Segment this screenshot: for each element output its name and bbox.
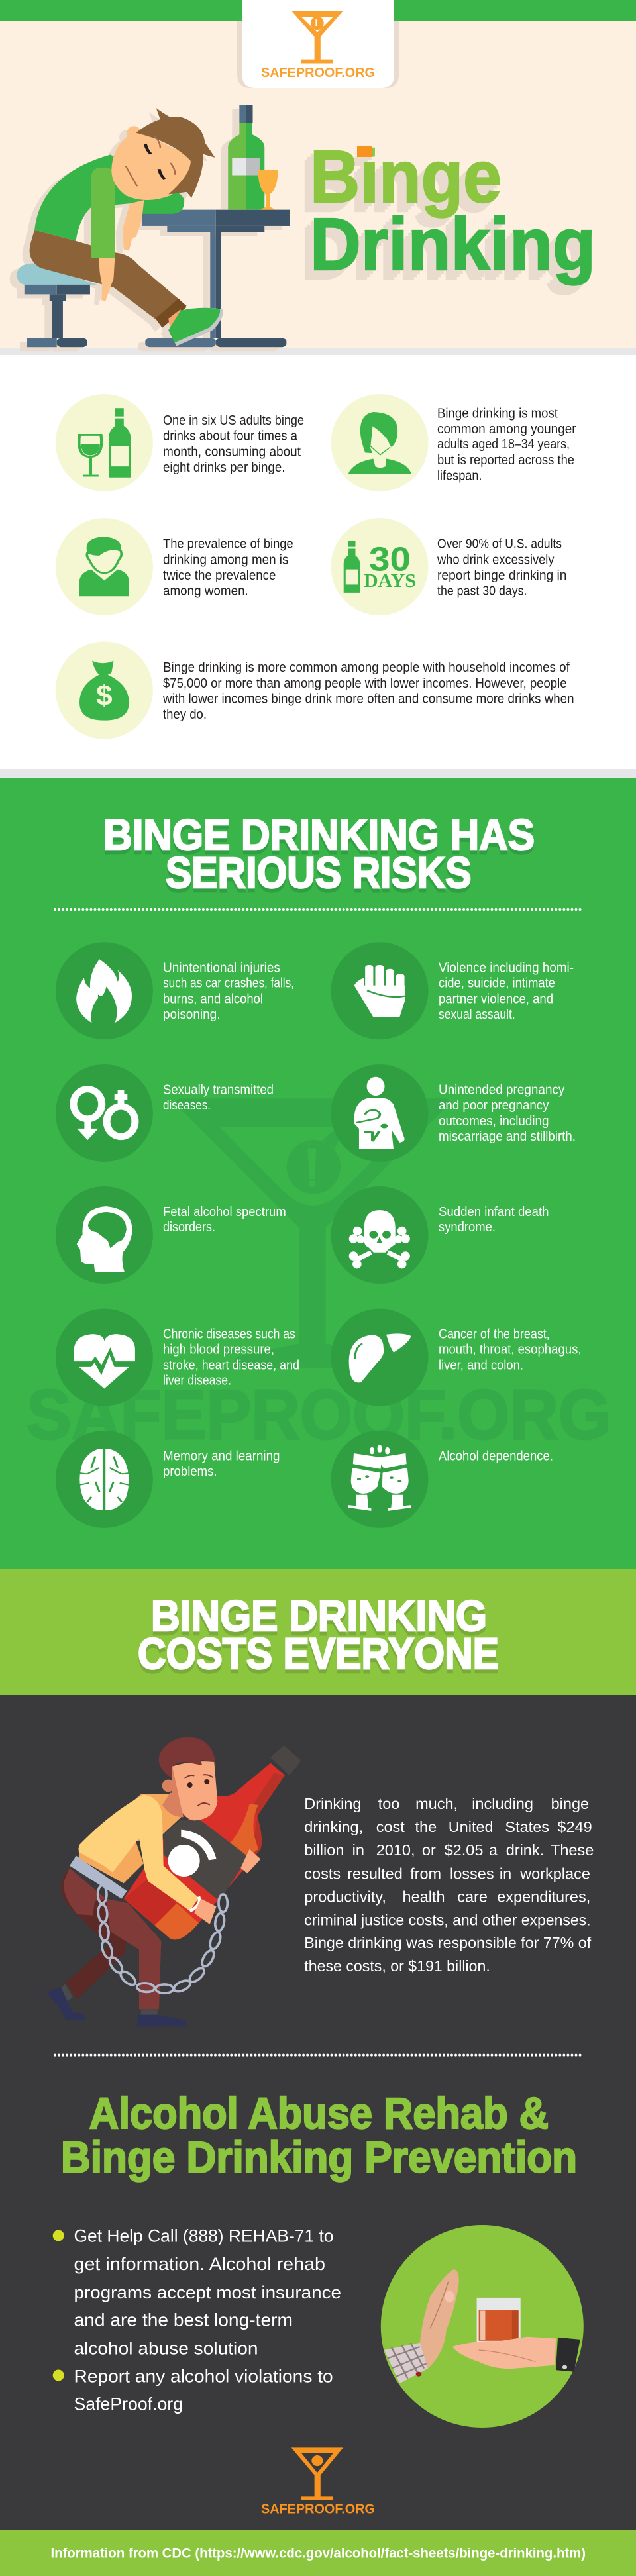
text: costs paragraph: workplace — [519, 1865, 590, 1882]
head — [111, 108, 215, 200]
text: who drink excessively — [437, 552, 554, 567]
text: Fetal alcohol spectrum — [163, 1205, 286, 1219]
text: costs paragraph: United — [449, 1818, 494, 1835]
heading: risks: SERIOUS RISKS — [166, 848, 472, 897]
risk: dependence — [331, 1431, 553, 1528]
text: Binge drinking is most — [437, 406, 558, 421]
text: Sexually transmitted — [163, 1082, 274, 1097]
text: the past 30 days. — [437, 584, 527, 599]
sweater — [34, 154, 184, 241]
icon: bottle with 30 days — [331, 518, 428, 615]
risk: SIDS — [331, 1186, 549, 1284]
watermark: SAFEPROOF.ORG: SAFEPROOF.ORG — [26, 1376, 611, 1454]
text: costs paragraph: binge — [551, 1795, 589, 1812]
text — [162, 660, 574, 722]
bullet 1 text: alcohol abuse solution — [74, 2338, 258, 2358]
text: high blood pressure, — [163, 1343, 274, 1357]
title: Binge Drinking: Binge — [310, 136, 502, 218]
sleeve — [384, 2343, 428, 2383]
heading: risks: BINGE DRINKING HAS — [103, 810, 535, 859]
text: twice the prevalence — [163, 568, 276, 583]
table — [142, 210, 290, 347]
legs — [46, 1868, 187, 2026]
text: disorders. — [163, 1220, 215, 1235]
icon: wine bottle and glass — [56, 394, 153, 491]
panel: serious risks — [0, 778, 636, 1569]
text: costs paragraph: These — [551, 1841, 594, 1859]
fact: young adults — [331, 394, 576, 491]
risk: violence — [331, 942, 574, 1039]
text — [437, 406, 576, 483]
text: Sudden infant death — [439, 1205, 549, 1219]
bottle and glass — [228, 105, 278, 210]
text: costs paragraph: the — [415, 1818, 437, 1835]
icon: pregnant woman — [331, 1064, 428, 1162]
illustration: man asleep at table — [17, 105, 290, 347]
text — [163, 960, 294, 1022]
text: Chronic diseases such as — [163, 1327, 295, 1341]
text: costs paragraph: drink. — [506, 1841, 544, 1859]
icon: head with brain — [56, 1186, 153, 1284]
text: they do. — [163, 707, 207, 722]
source text: Information from CDC (https://www.cdc.gov/alcohol/fact-sheets/binge-drinking.htm) — [50, 2546, 586, 2561]
panel: key facts — [0, 355, 636, 769]
text: costs paragraph: States — [505, 1818, 549, 1835]
text — [437, 537, 567, 599]
text: adults aged 18–34 years, — [437, 437, 570, 452]
text: Binge drinking is more common among people with household incomes of — [163, 660, 570, 675]
text: costs paragraph: criminal justice costs, and other expenses. — [304, 1911, 591, 1928]
text: lifespan. — [437, 468, 482, 483]
text — [163, 1327, 299, 1388]
icon: bottle with 30 days: 30 — [369, 541, 411, 578]
text: costs paragraph: losses — [450, 1865, 494, 1882]
text: costs paragraph: expenditures, — [497, 1888, 590, 1905]
watermark: martini glass — [176, 1098, 449, 1368]
fact: men versus women — [56, 518, 293, 615]
icon: heart with pulse — [56, 1309, 153, 1406]
title: Binge Drinking — [310, 136, 596, 285]
text — [439, 1205, 549, 1235]
text: common among younger — [437, 422, 576, 437]
text: Unintentional injuries — [163, 960, 280, 975]
bullet 1 text — [74, 2226, 341, 2358]
text: Unintended pregnancy — [439, 1082, 564, 1097]
bullet 2 text: Report any alcohol violations to — [74, 2367, 333, 2387]
icon: toasting glasses — [331, 1431, 428, 1528]
text: costs paragraph: health — [403, 1888, 445, 1905]
heading: costs: COSTS EVERYONE — [138, 1629, 499, 1678]
bullet 2 text — [74, 2367, 333, 2414]
icon: brain — [56, 1431, 153, 1528]
text: costs paragraph: 2010, — [376, 1841, 415, 1859]
text: month, consuming about — [163, 444, 301, 459]
text: diseases. — [163, 1098, 211, 1113]
panel: dark costs and prevention — [0, 1695, 636, 2530]
text: with lower incomes binge drink more often and consume more drinks when — [162, 692, 574, 706]
text: costs paragraph: from — [410, 1865, 441, 1882]
top green band — [0, 0, 636, 21]
risk: memory — [56, 1431, 280, 1528]
text — [163, 1082, 274, 1113]
text: One in six US adults binge — [163, 413, 304, 428]
fact: one in six — [56, 394, 304, 491]
text: Cancer of the breast, — [439, 1327, 550, 1341]
text: costs paragraph: productivity, — [304, 1888, 386, 1905]
risk: chronic diseases — [56, 1309, 299, 1406]
offering hand — [452, 2337, 556, 2369]
text: costs paragraph: $2.05 — [445, 1841, 483, 1859]
icon: bottle with 30 days: DAYS — [364, 570, 416, 592]
raised hand — [420, 2269, 459, 2369]
text: costs paragraph: in — [500, 1865, 511, 1882]
text: costs paragraph: costs — [304, 1865, 341, 1882]
text: among women. — [163, 584, 248, 599]
heading: prevention: Alcohol Abuse Rehab & — [89, 2088, 549, 2138]
icon: money bag: $ — [96, 680, 113, 712]
text: partner violence, and — [439, 992, 553, 1006]
text: The prevalence of binge — [163, 537, 293, 552]
chain — [97, 1886, 227, 1994]
heading: costs — [138, 1591, 499, 1678]
panel: hero background — [0, 0, 636, 348]
risk: cancer — [331, 1309, 582, 1406]
text: cide, suicide, intimate — [439, 976, 555, 991]
cuff — [556, 2338, 580, 2372]
text: costs paragraph: too — [378, 1795, 399, 1812]
risk: fetal alcohol — [56, 1186, 286, 1284]
bullet 2 text: SafeProof.org — [74, 2394, 183, 2414]
text — [163, 537, 293, 599]
text: costs paragraph: drinking, — [304, 1818, 363, 1835]
text: eight drinks per binge. — [163, 460, 285, 475]
bullet 1 text: get information. Alcohol rehab — [74, 2254, 325, 2274]
heading: risks — [103, 810, 535, 897]
text: but is reported across the — [437, 453, 574, 468]
band: grey divider above risks — [0, 769, 636, 778]
hands — [194, 1849, 260, 1924]
sleeve and hands — [91, 168, 144, 301]
bottle — [124, 1745, 300, 1939]
text: costs paragraph: billion — [304, 1841, 344, 1859]
logo wordmark: SAFEPROOF.ORG — [261, 2502, 375, 2517]
panel: costs heading — [0, 1569, 636, 1695]
icon: martini logo — [292, 11, 343, 63]
text: such as car crashes, falls, — [163, 976, 294, 991]
text: liver disease. — [163, 1374, 231, 1388]
stool — [17, 264, 97, 347]
head — [159, 1737, 217, 1820]
text: $75,000 or more than among people with lower incomes. However, people — [163, 676, 567, 691]
icon: man — [56, 518, 153, 615]
text: drinking among men is — [163, 552, 288, 567]
text: outcomes, including — [439, 1114, 549, 1129]
fact: past 30 days — [331, 518, 567, 615]
shoe — [168, 308, 223, 346]
text: costs paragraph: cost — [376, 1818, 405, 1835]
icon: gender symbols — [56, 1064, 153, 1162]
bullet 1 text: and are the best long-term — [74, 2310, 293, 2330]
illustration: refusing a drink — [381, 2225, 584, 2428]
text — [163, 1205, 286, 1235]
heading: costs: BINGE DRINKING — [151, 1591, 487, 1640]
text: miscarriage and stillbirth. — [439, 1129, 576, 1144]
list: prevention bullets — [53, 2226, 341, 2414]
icon: woman — [331, 394, 428, 491]
bullet 1 text: Get Help Call (888) REHAB-71 to — [74, 2226, 334, 2245]
text: sexual assault. — [439, 1007, 515, 1022]
text: costs paragraph: these costs, or $191 billion. — [304, 1957, 490, 1975]
text: burns, and alcohol — [163, 992, 263, 1006]
text: liver, and colon. — [439, 1358, 523, 1372]
risk: injuries — [56, 942, 294, 1039]
illustration: man chained to bottle — [46, 1737, 300, 2026]
text: and poor pregnancy — [439, 1098, 549, 1113]
text: costs paragraph: or — [422, 1841, 436, 1859]
panel: logo tab — [237, 0, 399, 88]
text: stroke, heart disease, and — [163, 1358, 299, 1372]
logo wordmark: SAFEPROOF.ORG — [261, 66, 375, 80]
text: Violence including homi- — [439, 960, 574, 975]
bullet 1 text: programs accept most insurance — [74, 2283, 341, 2302]
icon: martini logo — [292, 2447, 343, 2500]
band: grey divider under hero — [0, 348, 636, 355]
text: Over 90% of U.S. adults — [437, 537, 562, 552]
fact: income — [56, 641, 574, 739]
text: Memory and learning — [163, 1449, 280, 1464]
text: poisoning. — [163, 1007, 220, 1022]
text — [163, 413, 304, 475]
icon: skull and crossbones — [331, 1186, 428, 1284]
icon: flame — [56, 942, 153, 1039]
heading: prevention: Binge Drinking Prevention — [61, 2133, 577, 2182]
text — [439, 1327, 582, 1372]
icon: money bag — [56, 641, 153, 739]
icon: liver — [331, 1309, 428, 1406]
text: syndrome. — [439, 1220, 496, 1235]
glass of whisky — [477, 2298, 521, 2342]
text: costs paragraph: $249 — [557, 1818, 592, 1835]
text: costs paragraph: Drinking — [304, 1795, 362, 1812]
text: costs paragraph — [304, 1795, 594, 1975]
text: report binge drinking in — [437, 568, 567, 583]
text: costs paragraph: Binge drinking was responsible for 77% of — [304, 1934, 592, 1951]
text — [439, 1082, 576, 1144]
text: costs paragraph: much, — [415, 1795, 458, 1812]
orange dot of the i — [357, 146, 372, 157]
risk: STDs — [56, 1064, 274, 1162]
panel: source footer — [0, 2530, 636, 2576]
text: costs paragraph: resulted — [347, 1865, 403, 1882]
text: costs paragraph: in — [352, 1841, 364, 1859]
text: costs paragraph: including — [472, 1795, 533, 1812]
text: problems. — [163, 1465, 217, 1479]
torso — [70, 1794, 199, 1911]
text: costs paragraph: care — [457, 1888, 488, 1905]
text: drinks about four times a — [163, 429, 298, 444]
text: Alcohol dependence. — [439, 1449, 553, 1464]
trousers — [30, 230, 187, 320]
footer logo — [261, 2447, 375, 2517]
heading: prevention — [61, 2088, 577, 2182]
icon: fist — [331, 942, 428, 1039]
bullet 2 — [53, 2370, 64, 2381]
bullet 1 — [53, 2230, 64, 2241]
risk: pregnancy — [331, 1064, 576, 1162]
text: mouth, throat, esophagus, — [439, 1343, 582, 1357]
text — [439, 960, 574, 1022]
title: Binge Drinking: Drinking — [310, 203, 596, 285]
text: costs paragraph: a — [489, 1841, 498, 1859]
text — [163, 1449, 280, 1479]
